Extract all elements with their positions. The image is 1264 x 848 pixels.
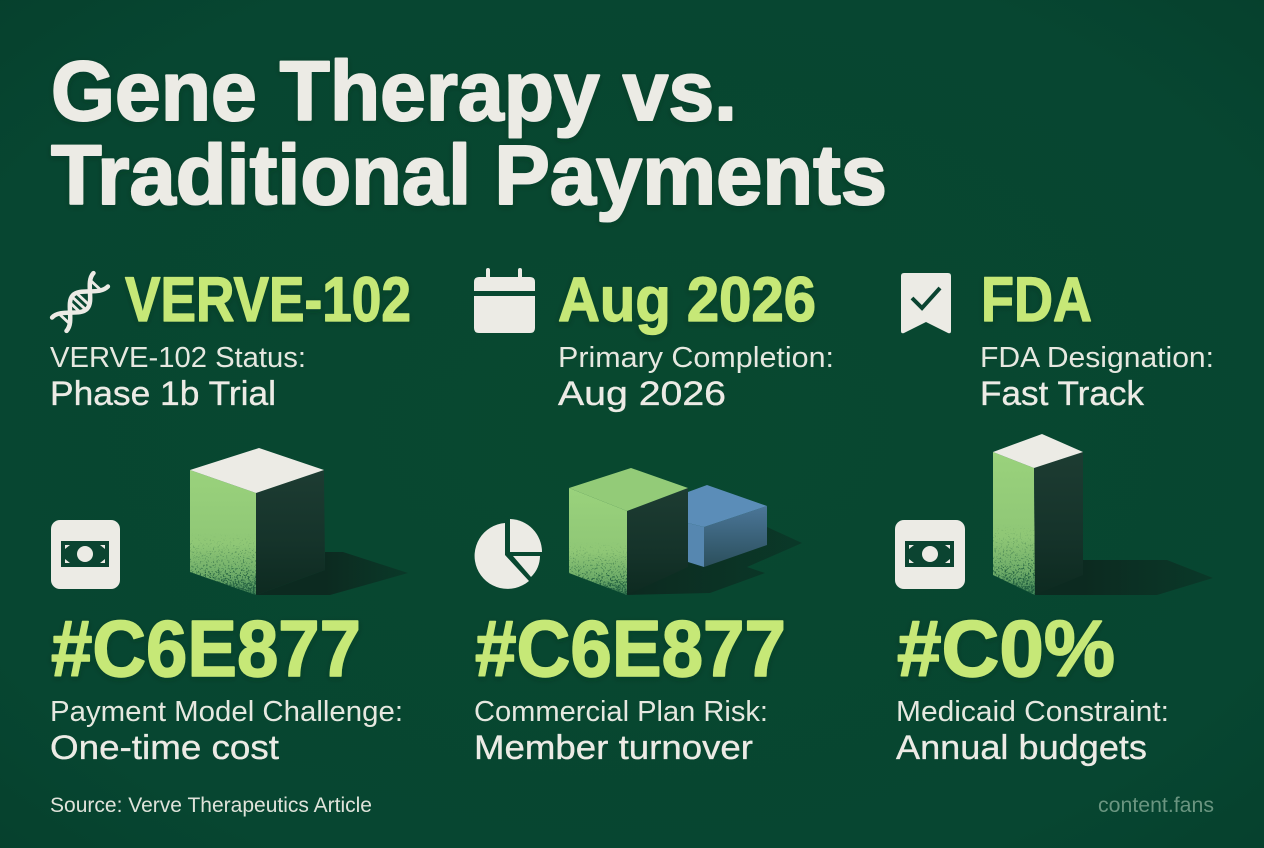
- stat: Aug 2026: Aug 2026: [558, 265, 816, 335]
- label: Commercial Plan Risk: Commercial Plan Risk:: [474, 696, 768, 728]
- panel: VERVE-102 status: [50, 265, 411, 413]
- stat: #C6E877: #C6E877: [475, 604, 786, 693]
- icon: money bill: [895, 520, 965, 589]
- title: [51, 44, 887, 222]
- stat: #C0%: #C0%: [897, 604, 1115, 693]
- label: VERVE-102 Status: VERVE-102 Status:: [50, 342, 306, 374]
- title: Traditional Payments: [51, 128, 887, 222]
- 3D column chart: [993, 434, 1213, 595]
- panel: Payment Model Challenge: [50, 448, 408, 767]
- panel: Primary Completion: [474, 265, 834, 413]
- icon: bookmark check: [901, 273, 951, 333]
- value: Fast Track: Fast Track: [980, 375, 1145, 413]
- stat: #C6E877: #C6E877: [51, 604, 361, 693]
- value: Phase 1b Trial: Phase 1b Trial: [50, 375, 276, 413]
- 3D cube chart: [190, 448, 408, 595]
- label: FDA Designation: FDA Designation:: [980, 342, 1214, 374]
- icon: calendar: [474, 268, 535, 333]
- label: Primary Completion: Primary Completion:: [558, 342, 834, 374]
- label: Medicaid Constraint: Medicaid Constraint:: [896, 696, 1169, 728]
- source note: Source: Verve Therapeutics Article: [50, 794, 372, 817]
- value: Member turnover: Member turnover: [474, 729, 753, 767]
- icon: DNA helix: [52, 273, 108, 331]
- label: Payment Model Challenge: Payment Model Challenge:: [50, 696, 403, 728]
- title: Gene Therapy vs.: [51, 44, 737, 138]
- icon: pie chart: [475, 519, 542, 589]
- value: One-time cost: One-time cost: [50, 729, 280, 767]
- icon: money bill: [51, 520, 120, 589]
- stat: VERVE-102: VERVE-102: [125, 265, 411, 335]
- 3D block chart: [569, 468, 802, 595]
- panel: Commercial Plan Risk: [474, 468, 802, 767]
- value: Aug 2026: Aug 2026: [558, 375, 726, 413]
- panel: FDA Designation: [901, 265, 1214, 413]
- panel: Medicaid Constraint: [895, 434, 1213, 767]
- stat: FDA: FDA: [981, 265, 1092, 335]
- brand credit: content.fans: [1098, 794, 1214, 817]
- value: Annual budgets: Annual budgets: [896, 729, 1147, 767]
